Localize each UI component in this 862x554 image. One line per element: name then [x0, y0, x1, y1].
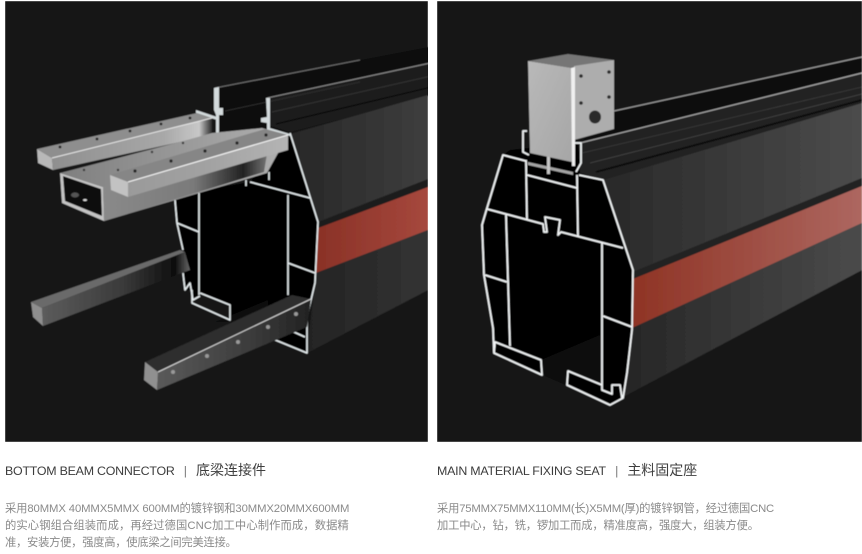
right description: 加工中心，钻，铣，锣加工而成，精准度高，强度大，组装方便。	[437, 520, 759, 532]
aluminium rail clips	[196, 87, 290, 136]
profile cross-section interior	[482, 143, 633, 405]
profile white outline	[482, 131, 633, 405]
profile white outline	[175, 133, 318, 353]
left description	[5, 502, 349, 549]
left description: 的实心钢组合组装而成，再经过德国CNC加工中心制作而成，数据精	[5, 520, 349, 532]
left description: 准，安装方便，强度高，使底梁之间完美连接。	[5, 537, 237, 549]
galvanized square tube bracket	[528, 54, 614, 175]
beam rail and ridged top	[580, 57, 862, 180]
front steel bar	[83, 129, 288, 197]
lower right flat bar with holes	[144, 295, 311, 390]
illustration canvas	[5, 1, 862, 442]
beam body: rail and ridged top	[215, 45, 440, 132]
rear steel bar	[37, 113, 212, 170]
lower left flat bar	[31, 250, 190, 326]
left heading: BOTTOM BEAM CONNECTOR | 底梁连接件	[5, 462, 266, 478]
rectangular steel tube	[60, 128, 288, 221]
bracket bolt holes	[579, 70, 611, 124]
right description	[437, 502, 774, 532]
panel: bottom beam connector render	[5, 1, 440, 442]
profile cross-section interior	[175, 132, 318, 353]
left description: 采用80MMX 40MMX5MMX 600MM的镀锌钢和30MMX20MMX600MM	[5, 503, 349, 515]
panel: main material fixing seat render	[437, 1, 862, 442]
beam side face with red stripe	[603, 103, 862, 397]
right description: 采用75MMX75MMX110MM(长)X5MM(厚)的镀锌钢管，经过德国CNC	[437, 503, 774, 515]
right heading: MAIN MATERIAL FIXING SEAT | 主料固定座	[437, 462, 697, 478]
beam side face with red stripe	[290, 95, 428, 353]
